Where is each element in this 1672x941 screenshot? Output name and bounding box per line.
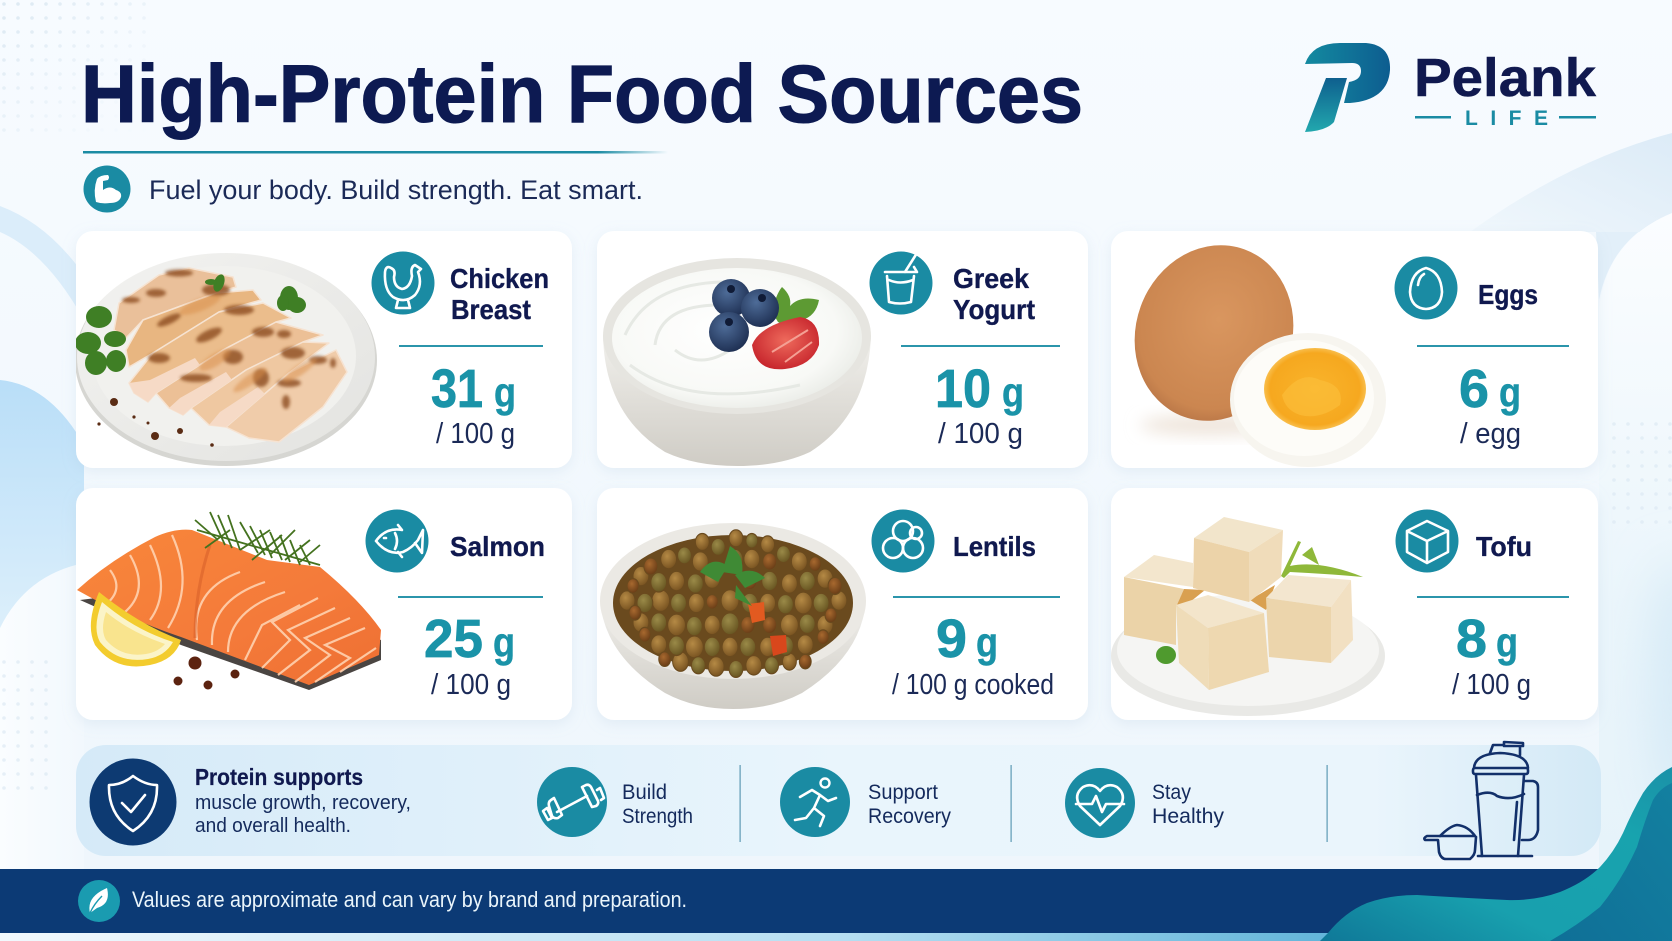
- panel: chicken breast: Breast: [451, 294, 531, 325]
- icon: egg: [1394, 256, 1458, 320]
- image: whole and halved egg: [1110, 223, 1386, 467]
- food name: Salmon: [450, 531, 545, 562]
- panel: protein benefits strip: Strength: [622, 805, 693, 828]
- food name: Eggs: [1478, 279, 1538, 310]
- benefit label: Stay: [1152, 781, 1191, 804]
- panel: lentils: / 100 g cooked: [892, 669, 1054, 701]
- panel: lentils: g: [976, 619, 998, 666]
- icon: leaf: [78, 880, 120, 922]
- footer note: Values are approximate and can vary by brand and preparation.: [132, 887, 687, 912]
- protein value: 9: [936, 609, 967, 669]
- panel: salmon: g: [493, 619, 515, 666]
- image: salmon fillet with lemon: [77, 512, 381, 690]
- panel: tofu: g: [1496, 619, 1518, 666]
- benefit label: Support: [868, 781, 938, 804]
- logo: LIFE: [1465, 107, 1548, 130]
- title rule: [83, 151, 668, 154]
- logo: Pelank: [1414, 48, 1597, 108]
- icon: runner: [780, 767, 850, 837]
- panel: eggs: [1110, 223, 1598, 468]
- image: grilled chicken on plate: [75, 253, 377, 466]
- panel: salmon: [76, 488, 572, 720]
- food name: Chicken: [450, 263, 549, 294]
- panel: greek yogurt: Yogurt: [953, 294, 1035, 325]
- image: lentil bowl: [600, 523, 866, 709]
- food name: Lentils: [953, 531, 1036, 562]
- panel: eggs: / egg: [1460, 418, 1521, 450]
- icon: lentils: [872, 510, 934, 572]
- panel: chicken breast: g: [494, 369, 516, 416]
- icon: shield with check: [90, 758, 176, 846]
- protein value: 8: [1456, 609, 1487, 669]
- protein supports text: [195, 764, 411, 837]
- benefit label: Build: [622, 781, 667, 804]
- protein value: 31: [431, 359, 483, 419]
- image: tofu cubes on plate: [1111, 517, 1385, 716]
- panel: chicken breast: [75, 231, 572, 468]
- panel: protein benefits strip: [76, 742, 1601, 859]
- panel: protein benefits strip: Healthy: [1152, 805, 1225, 828]
- protein supports text: and overall health.: [195, 814, 351, 837]
- panel: tofu: [1111, 488, 1598, 720]
- protein value: 6: [1459, 359, 1489, 419]
- panel: greek yogurt: / 100 g: [938, 418, 1023, 450]
- protein value: 25: [424, 609, 483, 669]
- tagline: Fuel your body. Build strength. Eat smart.: [149, 175, 643, 205]
- icon: tofu cube: [1396, 510, 1458, 572]
- panel: eggs: g: [1499, 369, 1521, 416]
- panel: greek yogurt: g: [1002, 369, 1024, 416]
- icon: flexed arm: [84, 166, 130, 212]
- icon: heart with pulse: [1065, 768, 1135, 838]
- protein value: 10: [935, 359, 991, 419]
- footer background and wave: [0, 767, 1672, 941]
- protein supports text: muscle growth, recovery,: [195, 791, 411, 814]
- panel: lentils: [597, 488, 1088, 720]
- title: High-Protein Food Sources: [81, 49, 1083, 140]
- panel: tofu: / 100 g: [1452, 669, 1531, 701]
- food name: Greek: [953, 263, 1029, 294]
- image: yogurt bowl: [603, 258, 871, 466]
- panel: greek yogurt: [597, 231, 1088, 468]
- icon: yogurt cup: [870, 252, 932, 314]
- icon: fish: [366, 510, 428, 572]
- icon: chicken: [372, 252, 434, 314]
- panel: protein benefits strip: Recovery: [868, 805, 951, 828]
- icon: dumbbell: [537, 767, 607, 837]
- protein supports text: Protein supports: [195, 764, 363, 790]
- food name: Tofu: [1476, 531, 1532, 562]
- panel: salmon: / 100 g: [431, 669, 511, 701]
- logo: [1305, 43, 1597, 132]
- panel: chicken breast: / 100 g: [436, 418, 515, 450]
- icon: protein shaker and scoop: [1424, 742, 1538, 859]
